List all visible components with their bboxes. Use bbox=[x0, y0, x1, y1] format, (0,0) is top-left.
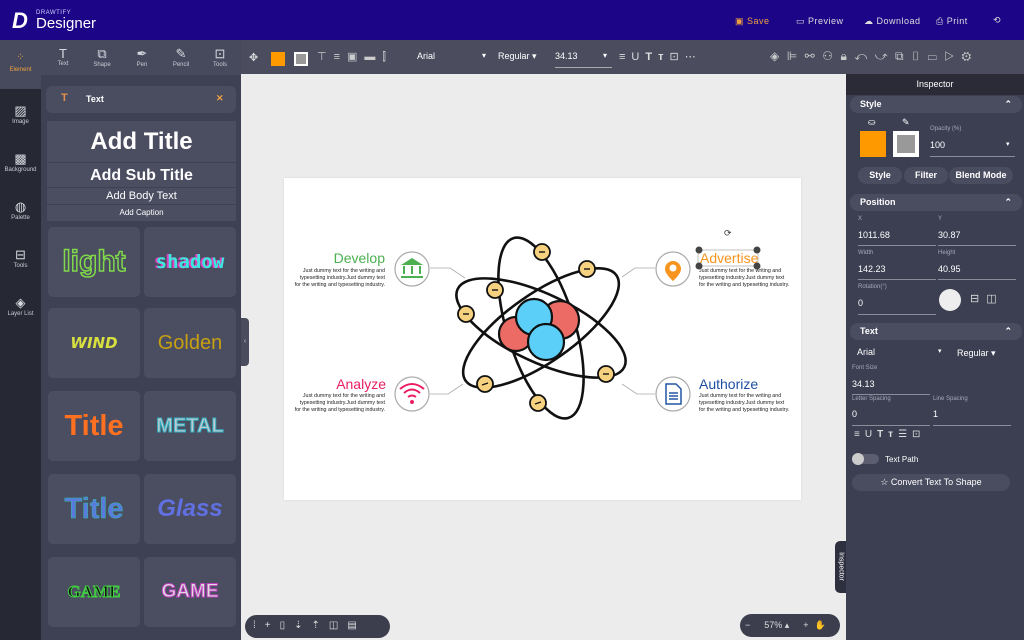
text: Regular ▾ bbox=[957, 348, 996, 358]
bottom page toolbar: ⁞+▯⇣⇡◫▤ bbox=[253, 620, 366, 631]
inspector panel: Inspector bbox=[916, 79, 954, 89]
text: Y bbox=[938, 216, 942, 222]
sidebar: Palette bbox=[11, 215, 30, 221]
text: Width bbox=[858, 250, 873, 256]
labels: typesetting industry.Just dummy text bbox=[300, 400, 386, 406]
text: 40.95 bbox=[938, 264, 961, 274]
text: Text Path bbox=[885, 455, 918, 464]
panel: text styles bbox=[41, 75, 241, 640]
text: 142.23 bbox=[858, 264, 886, 274]
top actions: ☁ Download bbox=[864, 16, 921, 26]
labels: typesetting industry.Just dummy text bbox=[300, 275, 386, 281]
labels: Analyze bbox=[336, 376, 386, 392]
add text options: Add Sub Title bbox=[90, 167, 193, 184]
panel header: ✕ bbox=[216, 93, 224, 103]
zoom control bbox=[740, 614, 840, 637]
tool icons: ⧉ bbox=[97, 46, 107, 61]
labels: Advertise bbox=[700, 250, 759, 266]
tool icons: Pencil bbox=[173, 62, 189, 68]
text: 30.87 bbox=[938, 230, 961, 240]
labels: Just dummy text for the writing and bbox=[303, 268, 385, 274]
panel header: T bbox=[61, 92, 68, 104]
text: Height bbox=[938, 250, 955, 256]
text: X bbox=[858, 216, 862, 222]
top edit toolbar: ≡UTт⊡⋯ bbox=[619, 51, 702, 63]
panel header: Text bbox=[86, 94, 104, 104]
top edit toolbar: ⊤≡▣▬⫿ bbox=[317, 51, 393, 63]
sidebar: Layer List bbox=[7, 311, 34, 317]
top edit toolbar bbox=[241, 40, 1024, 74]
text: ⛀ bbox=[868, 117, 876, 127]
element tab: ⁘ bbox=[16, 52, 25, 63]
labels bbox=[295, 250, 789, 413]
text: ▾ bbox=[938, 348, 942, 355]
sidebar: ▩ bbox=[14, 151, 27, 166]
top actions: ⎙ Print bbox=[936, 16, 968, 26]
top actions: ⟲ bbox=[993, 15, 1001, 25]
icon: document bbox=[666, 384, 681, 404]
top bar bbox=[0, 0, 1024, 40]
tool icons: Tools bbox=[213, 62, 227, 68]
sidebar: ⊟ bbox=[15, 247, 26, 262]
selection handles: ⟳ bbox=[724, 228, 732, 238]
panel: text styles: Glass bbox=[157, 495, 223, 522]
sidebar: Tools bbox=[13, 263, 28, 269]
panel: text styles: Golden bbox=[158, 332, 222, 354]
text: Line Spacing bbox=[933, 396, 968, 402]
labels: for the writing and typesetting industry. bbox=[699, 282, 789, 288]
style cards bbox=[48, 227, 140, 297]
text: 0 bbox=[852, 409, 857, 419]
inspector tab bbox=[835, 541, 846, 593]
panel: text styles: GAME bbox=[162, 581, 218, 602]
connectors bbox=[430, 268, 655, 394]
text: Blend Mode bbox=[956, 170, 1006, 180]
logo: D bbox=[12, 8, 28, 33]
zoom control: − 57% ▴ + ✋ bbox=[745, 620, 826, 630]
logo: DRAWTIFY bbox=[36, 10, 71, 16]
panel: text styles: METAL bbox=[156, 414, 224, 436]
labels: for the writing and typesetting industry. bbox=[295, 282, 385, 288]
tool icons: Text bbox=[57, 61, 68, 67]
infographic: atom bbox=[294, 228, 789, 420]
element tab bbox=[9, 52, 32, 73]
tool icons: ✎ bbox=[176, 46, 186, 61]
labels: Just dummy text for the writing and bbox=[303, 393, 385, 399]
panel: text styles: shadow bbox=[156, 251, 224, 273]
tool icons: Shape bbox=[93, 62, 111, 68]
labels: Just dummy text for the writing and bbox=[699, 268, 781, 274]
text section: ⌃ bbox=[1004, 326, 1012, 336]
icon: wifi bbox=[400, 384, 424, 397]
icon: bank bbox=[401, 258, 423, 278]
position section: Position bbox=[860, 197, 896, 207]
element tab: Element bbox=[9, 67, 32, 73]
text: Rotation(°) bbox=[858, 284, 887, 290]
top edit toolbar: Regular ▾ bbox=[498, 51, 537, 61]
labels: Develop bbox=[334, 250, 385, 266]
panel: text styles: Title bbox=[64, 410, 124, 442]
top edit toolbar: ◈⊫⚯⚇🔒︎⤺⤻⧉▯▭▷⚙ bbox=[770, 49, 979, 63]
icon: pin bbox=[665, 261, 681, 281]
text: Letter Spacing bbox=[852, 396, 891, 402]
selection handles bbox=[696, 228, 760, 270]
collapse handle bbox=[241, 318, 249, 366]
text: Arial bbox=[857, 347, 875, 357]
inspector tab: Inspector bbox=[838, 552, 844, 581]
sidebar: ◍ bbox=[15, 199, 26, 214]
bottom page toolbar bbox=[245, 615, 390, 638]
orbits bbox=[443, 228, 639, 428]
text: Filter bbox=[915, 170, 937, 180]
text: ▾ bbox=[1006, 141, 1010, 148]
text: Opacity (%) bbox=[930, 126, 961, 132]
text: ⊟◫ bbox=[970, 293, 1004, 305]
add text options: Add Title bbox=[90, 128, 193, 155]
text: 34.13 bbox=[852, 379, 875, 389]
add text options: Add Body Text bbox=[106, 190, 177, 202]
tool icons bbox=[57, 46, 227, 68]
top actions: ▭ Preview bbox=[796, 16, 844, 26]
text: ✎ bbox=[902, 117, 910, 127]
top edit toolbar: 34.13 bbox=[555, 51, 578, 61]
nucleus bbox=[499, 299, 579, 360]
panel: text styles: Title bbox=[64, 492, 124, 524]
top actions bbox=[735, 15, 1001, 26]
text: Font Size bbox=[852, 365, 877, 371]
text section bbox=[850, 323, 1022, 340]
page canvas bbox=[284, 178, 801, 500]
top edit toolbar: ▾ bbox=[482, 51, 486, 60]
tool icons: Pen bbox=[137, 62, 147, 68]
inspector panel bbox=[846, 74, 1024, 640]
labels: for the writing and typesetting industry. bbox=[699, 407, 789, 413]
text: 100 bbox=[930, 140, 945, 150]
labels: Just dummy text for the writing and bbox=[699, 393, 781, 399]
tool icons: ⊡ bbox=[215, 46, 225, 61]
logo: Designer bbox=[36, 15, 96, 32]
text: Style bbox=[869, 170, 891, 180]
sidebar: ▨ bbox=[14, 103, 27, 118]
icon circles bbox=[395, 252, 690, 411]
collapse handle: ‹ bbox=[244, 338, 246, 345]
left toolbar row bbox=[0, 40, 241, 89]
position section: ⌃ bbox=[1004, 197, 1012, 207]
top actions: ▣ Save bbox=[735, 16, 770, 26]
logo bbox=[12, 8, 96, 33]
text: ☆ Convert Text To Shape bbox=[880, 477, 982, 487]
top edit toolbar: Arial bbox=[417, 51, 435, 61]
sidebar: Image bbox=[12, 119, 29, 125]
position section bbox=[850, 194, 1022, 211]
panel: text styles: WIND bbox=[70, 334, 118, 352]
text section: Text bbox=[860, 326, 878, 336]
panel: text styles: GAME bbox=[68, 582, 120, 601]
style section: Style bbox=[860, 99, 882, 109]
labels: Authorize bbox=[699, 376, 758, 392]
style section: ⌃ bbox=[1004, 99, 1012, 109]
text: 1011.68 bbox=[858, 230, 890, 240]
sidebar: Background bbox=[4, 167, 37, 173]
add text options bbox=[47, 121, 236, 221]
tool icons: ✒ bbox=[137, 46, 147, 61]
text: ≡UTт☰⊡ bbox=[854, 429, 925, 440]
top edit toolbar: ✥ bbox=[249, 52, 258, 64]
tool icons: T bbox=[59, 46, 67, 61]
sidebar: ◈ bbox=[16, 295, 26, 310]
labels: for the writing and typesetting industry. bbox=[295, 407, 385, 413]
electrons bbox=[458, 244, 614, 411]
labels: typesetting industry.Just dummy text bbox=[699, 275, 785, 281]
text: 0 bbox=[858, 298, 863, 308]
panel header bbox=[46, 86, 236, 113]
labels: typesetting industry.Just dummy text bbox=[699, 400, 785, 406]
add text options: Add Caption bbox=[119, 208, 164, 217]
text: 1 bbox=[933, 409, 938, 419]
sidebar bbox=[0, 89, 41, 640]
style section bbox=[850, 96, 1022, 113]
top edit toolbar: ▾ bbox=[603, 51, 607, 60]
